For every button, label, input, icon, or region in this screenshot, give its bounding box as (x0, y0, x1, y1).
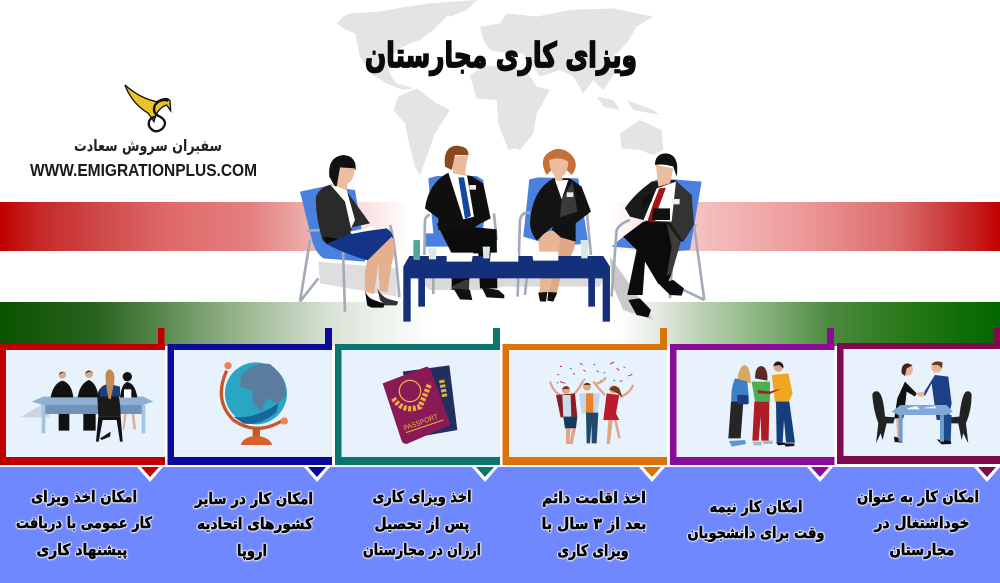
icon: handshake at a table (872, 361, 972, 444)
panel 3: work visa after study (335, 328, 500, 482)
caption 1: پیشنهاد کاری (36, 541, 128, 560)
caption 2: اروپا (237, 542, 267, 561)
logo name: سفیران سروش سعادت (74, 136, 222, 155)
icon: globe (221, 362, 288, 445)
illustration: panel meeting with four people and table (300, 146, 704, 322)
icon: winged S logo (125, 85, 171, 131)
caption 5: امکان کار نیمه (710, 498, 802, 516)
icon: passports: PASSPORT (402, 412, 440, 433)
icon: passports (383, 365, 457, 444)
panel 1: general work visa with job offer (0, 328, 165, 482)
chair 4 and man with red tie (612, 153, 704, 317)
caption 6: خوداشتغال در (874, 514, 970, 532)
icon: interview at a desk (20, 369, 153, 442)
caption 4: ویزای کاری (558, 542, 628, 560)
marker triangle (137, 467, 163, 482)
bottom band with captions (0, 467, 1000, 583)
panel 5: part-time work for students (670, 328, 834, 482)
caption 6: امکان کار به عنوان (857, 488, 979, 506)
chair 3 and woman with orange hair (518, 149, 591, 302)
caption 1: کار عمومی با دریافت (16, 514, 153, 532)
caption 3: پس از تحصیل (374, 515, 470, 534)
caption 3 (363, 488, 481, 559)
caption 2: امکان کار در سایر (194, 490, 313, 508)
caption 1: امکان اخذ ویزای (31, 488, 137, 506)
caption 4: اخذ اقامت دائم (542, 489, 646, 507)
icon: three students reading (728, 362, 795, 447)
panel 2: work in other EU countries (168, 328, 332, 482)
caption 3: ارزان در مجارستان (363, 541, 481, 559)
logo (30, 85, 257, 180)
caption 5: وقت برای دانشجویان (688, 524, 824, 542)
background: flag stripes (0, 202, 1000, 346)
caption 2: کشورهای اتحادیه (197, 515, 314, 533)
chair 1 and woman with notepad (300, 155, 399, 312)
title: ویزای کاری مجارستان (365, 36, 637, 76)
world map (337, 0, 663, 175)
caption 2 (194, 490, 314, 561)
website url: WWW.EMIGRATIONPLUS.COM (30, 160, 257, 180)
table with papers and bottles (403, 240, 610, 322)
caption 4 (542, 489, 646, 560)
chair 2 and man with blue tie (424, 146, 504, 300)
icon: three celebrating people with confetti (550, 362, 633, 444)
panel 4: permanent residence after 3 years (502, 328, 667, 482)
panel 6: self-employment in Hungary (837, 328, 1000, 482)
caption 1 (16, 488, 153, 560)
caption 4: بعد از ۳ سال با (542, 515, 646, 533)
caption 5 (688, 498, 824, 542)
caption 6: مجارستان (890, 541, 954, 559)
caption 6 (857, 488, 979, 559)
caption 3: اخذ ویزای کاری (372, 488, 472, 506)
